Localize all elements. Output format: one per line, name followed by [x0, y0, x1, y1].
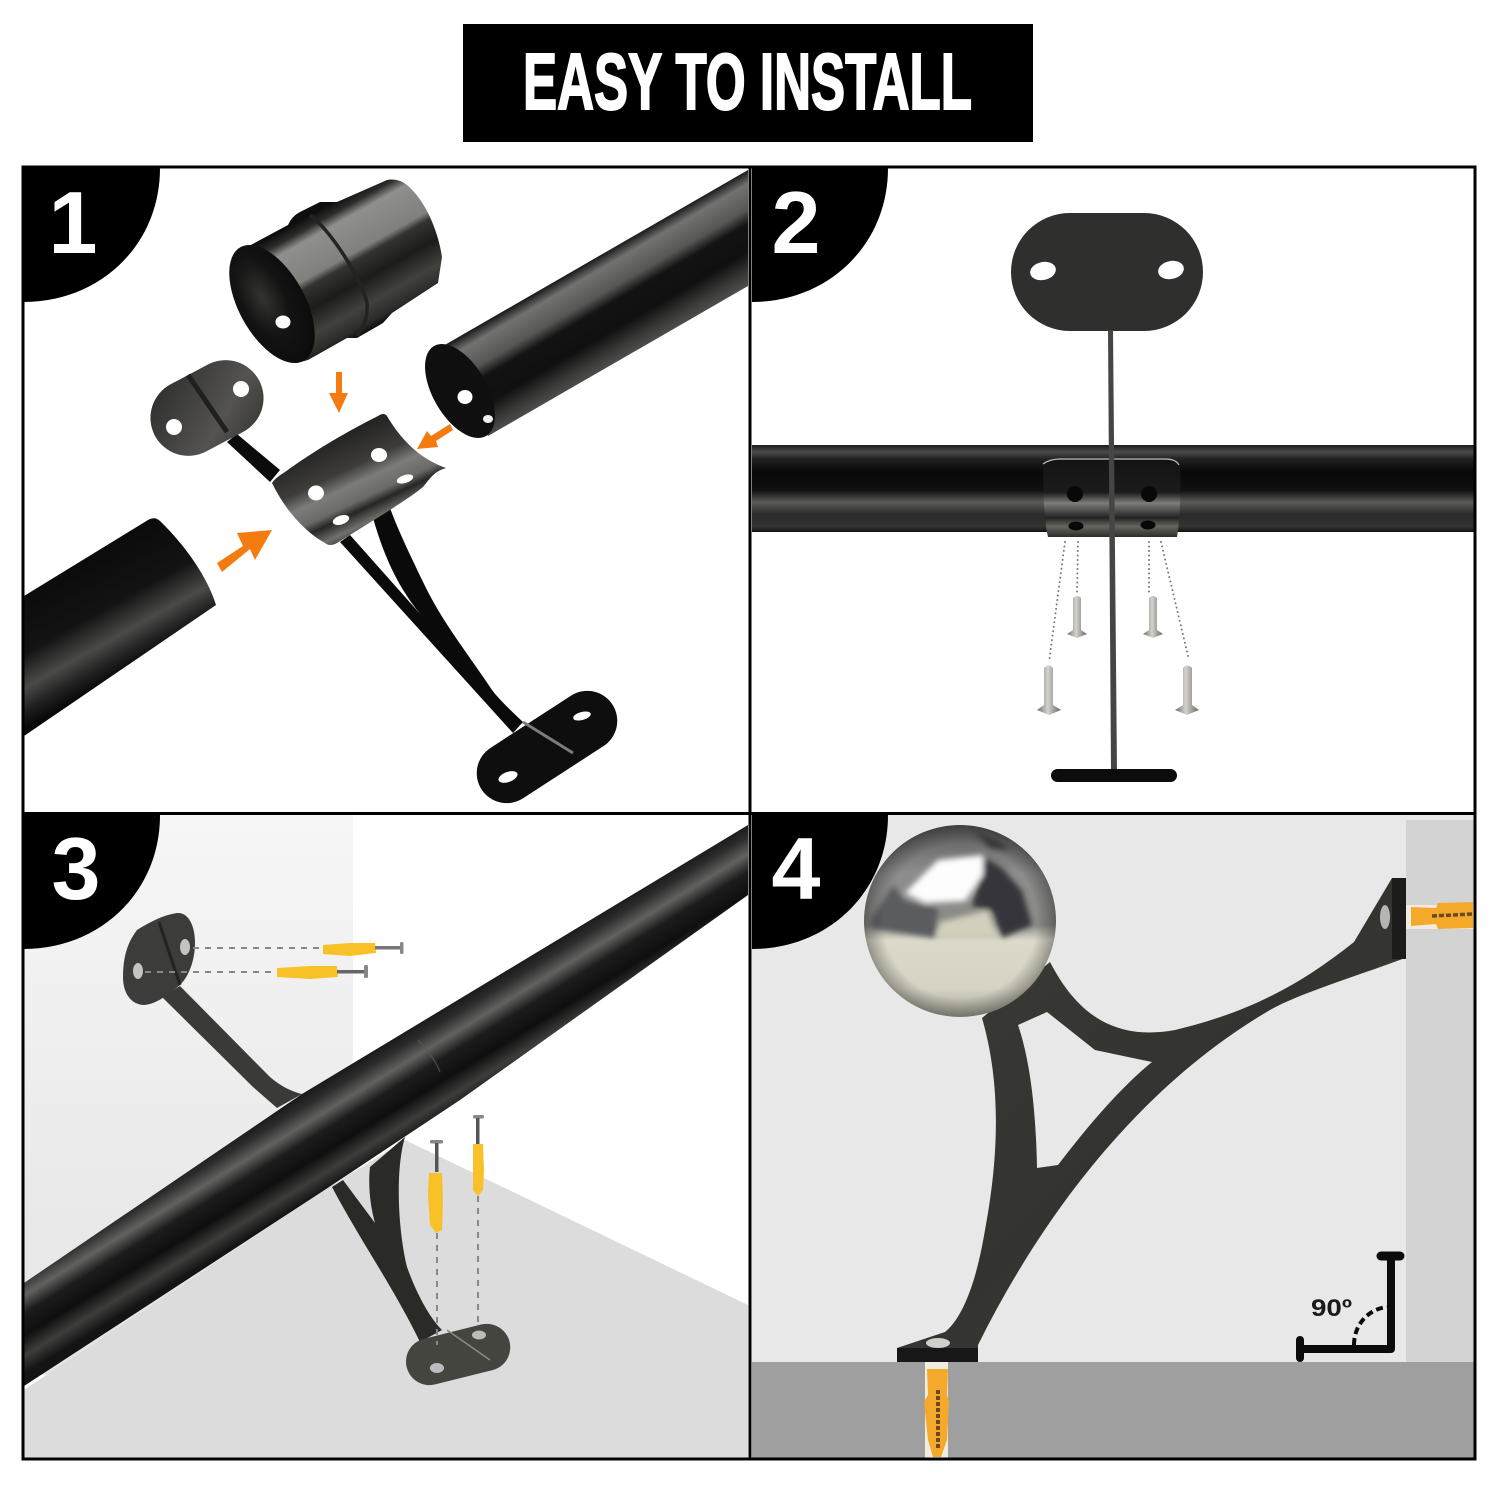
- panel 2: side view: [752, 168, 1475, 812]
- bracket stem: [340, 508, 523, 733]
- plate front: [1011, 213, 1203, 331]
- step badge 1: 1: [49, 173, 97, 272]
- anchor: wall: [1406, 902, 1474, 929]
- step badge 3: 3: [52, 819, 100, 918]
- guides: anchors: [145, 948, 478, 1345]
- floor band: [752, 1362, 1475, 1458]
- wall anchors: [277, 942, 404, 979]
- tube: lower left: [24, 518, 216, 736]
- floor anchors: [428, 1115, 484, 1233]
- panel 4: ball end and bracket: [752, 815, 1475, 1458]
- panel 1: joining the tubes: [24, 168, 749, 815]
- step badge 1: [24, 168, 160, 302]
- right angle symbol: [1300, 1256, 1400, 1358]
- wall bracket: [123, 913, 302, 1108]
- saddle: [1043, 459, 1180, 537]
- step badge 2: 2: [772, 173, 820, 272]
- arrows: orange: [217, 372, 453, 572]
- floor plate: [465, 679, 629, 815]
- step badge 4: [752, 815, 888, 949]
- panel 3: wall and floor mounting: [24, 815, 749, 1458]
- screw guides: [1049, 542, 1189, 662]
- wall shade: [24, 815, 353, 1375]
- floor bracket: [332, 1137, 515, 1390]
- step badge 4: 4: [772, 819, 821, 918]
- title banner: [463, 24, 1033, 142]
- coupling sleeve: [212, 180, 442, 377]
- step badge 2: [752, 168, 888, 302]
- right angle symbol: 90º: [1311, 1295, 1352, 1322]
- base plate: [1051, 769, 1177, 782]
- bracket: [897, 878, 1406, 1362]
- tube: [752, 445, 1475, 532]
- step badge 3: [24, 815, 160, 949]
- tube: [24, 825, 748, 1386]
- wall side: [1406, 820, 1475, 1362]
- tube: upper right: [411, 170, 748, 450]
- title banner: EASY TO INSTALL: [523, 37, 972, 126]
- wall plate bracket: [137, 347, 280, 482]
- steel ball: [860, 822, 1060, 1022]
- screws: [1037, 596, 1199, 715]
- bracket saddle: [272, 414, 446, 545]
- stem: [1108, 330, 1117, 772]
- floor: [24, 1140, 748, 1458]
- anchor: floor: [924, 1362, 949, 1458]
